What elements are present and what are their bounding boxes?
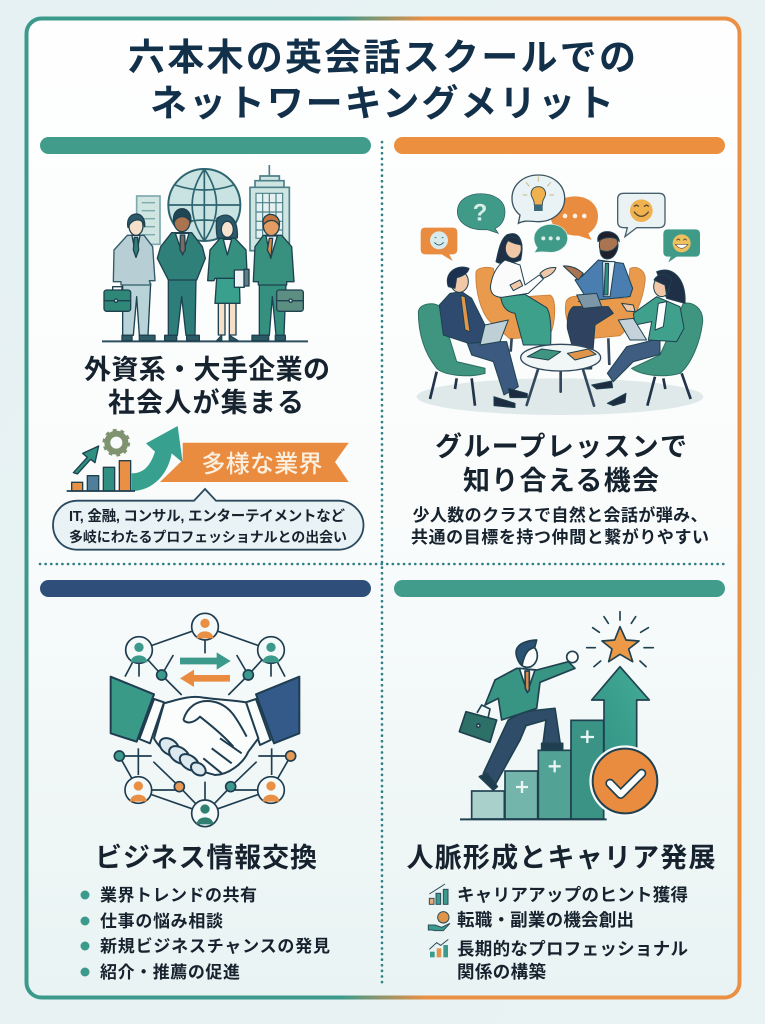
bullet list: information topics: 紹介・推薦の促進 [100,963,240,982]
title [128,37,636,124]
title: 六本木の英会話スクールでの [128,37,636,78]
speech bubbles [421,175,700,262]
text: group lesson description [411,505,709,547]
heading: 外資系: 社会人が集まる [108,387,304,418]
icon list: career benefits [428,884,688,982]
header bar teal [394,580,725,597]
person 3 [208,215,249,341]
icon list: career benefits: 長期的なプロフェッショナル [457,939,688,959]
illustration: business people with globe and buildings [102,165,308,341]
man in navy suit [439,267,527,408]
woman in green jacket [592,270,685,406]
title: ネットワーキングメリット [150,83,614,124]
illustration: climbing career steps to a star [459,612,661,819]
heading: 人脈形成: 人脈形成とキャリア発展 [406,843,716,873]
bullet list: information topics: 仕事の悩み相談 [100,912,223,931]
text: group lesson description: 少人数のクラスで自然と会話が弾み、 [412,505,708,525]
icon list: career benefits: キャリアアップのヒント獲得 [457,885,688,905]
person 1 [104,214,155,341]
panel: business information exchange [40,580,371,982]
woman in white shirt [491,234,556,345]
green chairs [418,304,485,376]
panel: networking and career development [394,580,725,982]
person 4 [252,214,303,341]
round table [521,344,601,406]
person 2 [157,209,205,341]
check badge [589,745,661,817]
bullet list: information topics: 業界トレンドの共有 [100,886,257,905]
icon: hand with coin [428,912,450,931]
bullet list: information topics: 新規ビジネスチャンスの発見 [100,936,330,956]
banner: diverse industries [160,443,349,482]
illustration: group conversation with speech bubbles [417,175,703,415]
star [602,627,639,662]
panel: foreign and major company professionals [40,137,371,550]
exchange arrows [180,652,231,670]
heading: グループレッスン [435,431,687,496]
arrow [592,667,649,792]
header bar navy [40,580,371,597]
panel: group lessons [394,137,725,547]
icon: growth bars [429,884,448,904]
bullet list: information topics [80,886,330,982]
callout: industry list [53,489,364,550]
climbing businessman [459,640,578,790]
header bar orange [394,137,725,154]
callout: industry list: IT, 金融, コンサル, エンターテイメントなど [69,507,346,525]
heading: グループレッスン: グループレッスンで [435,431,687,462]
text: group lesson description: 共通の目標を持つ仲間と繋がりやすい [411,527,709,547]
back chairs [476,267,645,339]
people icons [130,619,279,824]
sleeves and hands [111,677,299,778]
icon: growth chart with gear and arrow [67,426,183,491]
heading: 外資系 [84,355,330,418]
header bar teal [40,137,371,154]
heading: 外資系: 外資系・大手企業の [84,355,330,385]
heading: グループレッスン: 知り合える機会 [463,466,659,496]
steps [472,720,604,819]
icon list: career benefits: 関係の構築 [457,962,546,982]
icon list: career benefits: 転職・副業の機会創出 [457,910,634,930]
callout: industry list: 多岐にわたるプロフェッショナルとの出会い [69,529,347,545]
banner: diverse industries: 多様な業界 [202,451,322,478]
illustration: handshake in network [111,613,299,827]
man in blue jacket [563,232,633,369]
heading: ビジネス情報交換: ビジネス情報交換 [95,843,317,873]
network lines [119,627,291,813]
speech bubbles: ? [473,200,487,227]
icon: chart with trend [429,939,448,957]
